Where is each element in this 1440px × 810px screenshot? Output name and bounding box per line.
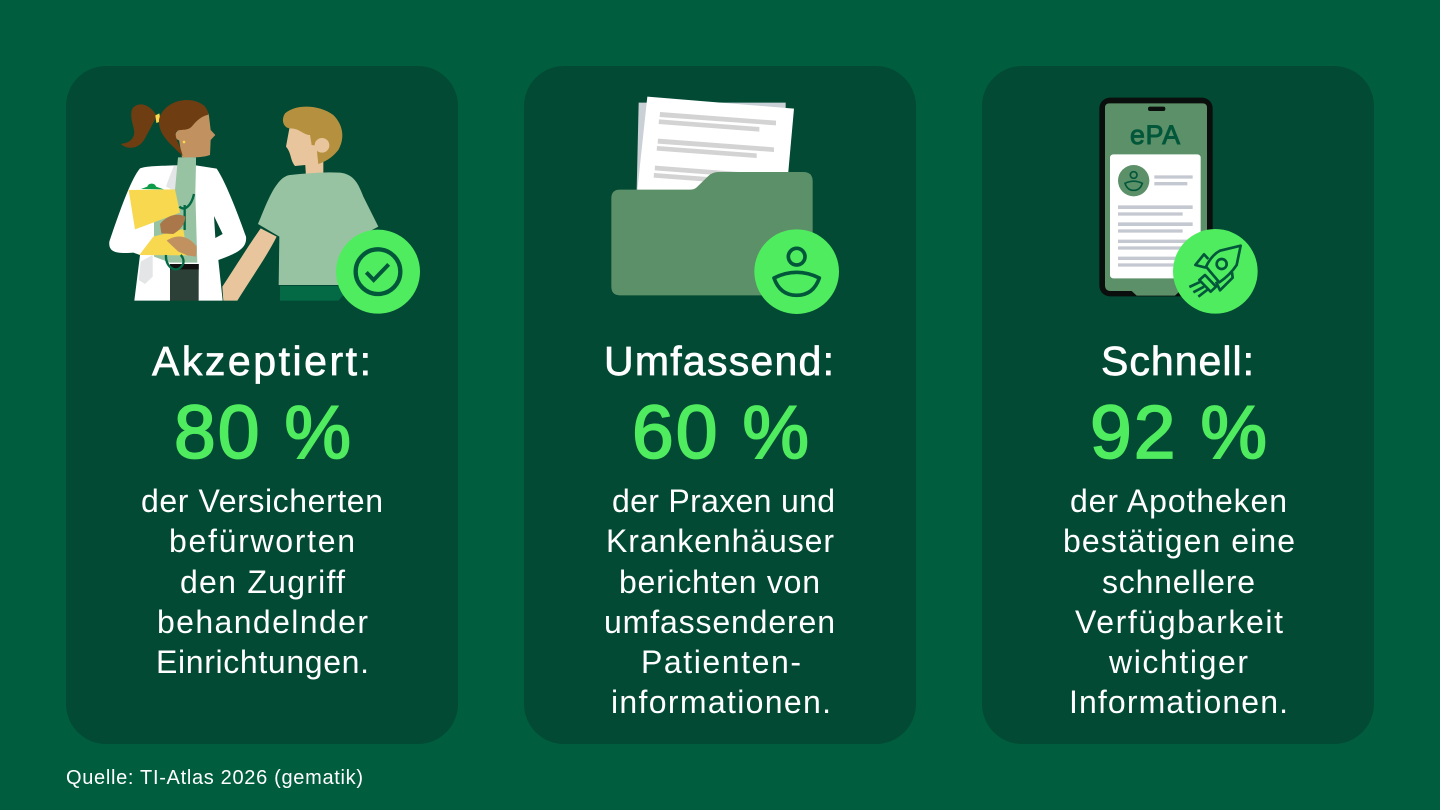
icon: person badge: [754, 229, 839, 314]
number: 80 %: 80 %: [174, 390, 351, 474]
text block: Verfügbarkeit: [1075, 604, 1283, 640]
text block: behandelnder: [157, 604, 368, 640]
illustration: doctor and patient: [109, 100, 420, 314]
icon: folder: [611, 172, 813, 295]
icon: patient: [222, 107, 378, 301]
text block: umfassenderen: [604, 604, 835, 640]
illustration: folder with documents: [611, 97, 839, 314]
icon: phone: [1099, 98, 1213, 296]
text block: der Apotheken: [1070, 483, 1287, 519]
text block: berichten von: [619, 564, 820, 600]
number: 60 %: 60 %: [632, 390, 809, 474]
text block: befürworten: [169, 523, 355, 559]
illustration: phone with ePA: [1099, 98, 1258, 314]
heading: Schnell:: [1101, 338, 1254, 384]
icon: back page: [637, 103, 786, 190]
icon: doctor: [109, 100, 246, 301]
heading: Umfassend:: [604, 338, 834, 384]
text block: Krankenhäuser: [606, 523, 834, 559]
text block: [141, 483, 383, 680]
text block: den Zugriff: [180, 564, 345, 600]
text block: Informationen.: [1069, 684, 1288, 720]
text block: der Praxen und: [612, 483, 835, 519]
icon: rocket badge: [1173, 229, 1258, 314]
source note: Quelle: TI-Atlas 2026 (gematik): [66, 767, 363, 789]
text block: schnellere: [1102, 564, 1255, 600]
icon: check badge: [336, 230, 420, 314]
panel: Akzeptiert: [66, 66, 458, 744]
text block: [1063, 483, 1295, 720]
number: 92 %: 92 %: [1090, 390, 1267, 474]
icon: record card: [1110, 154, 1201, 278]
text block: [604, 483, 835, 720]
icon: front page: [637, 97, 794, 190]
label: ePA: ePA: [1130, 120, 1180, 150]
heading: Akzeptiert:: [152, 338, 371, 384]
text block: der Versicherten: [141, 483, 383, 519]
text block: informationen.: [611, 684, 831, 720]
text block: Patienten-: [641, 644, 801, 680]
text block: wichtiger: [1108, 644, 1248, 680]
panel: Umfassend: [524, 66, 916, 744]
text block: bestätigen eine: [1063, 523, 1295, 559]
panel: Schnell: [982, 66, 1374, 744]
text block: Einrichtungen.: [156, 644, 369, 680]
